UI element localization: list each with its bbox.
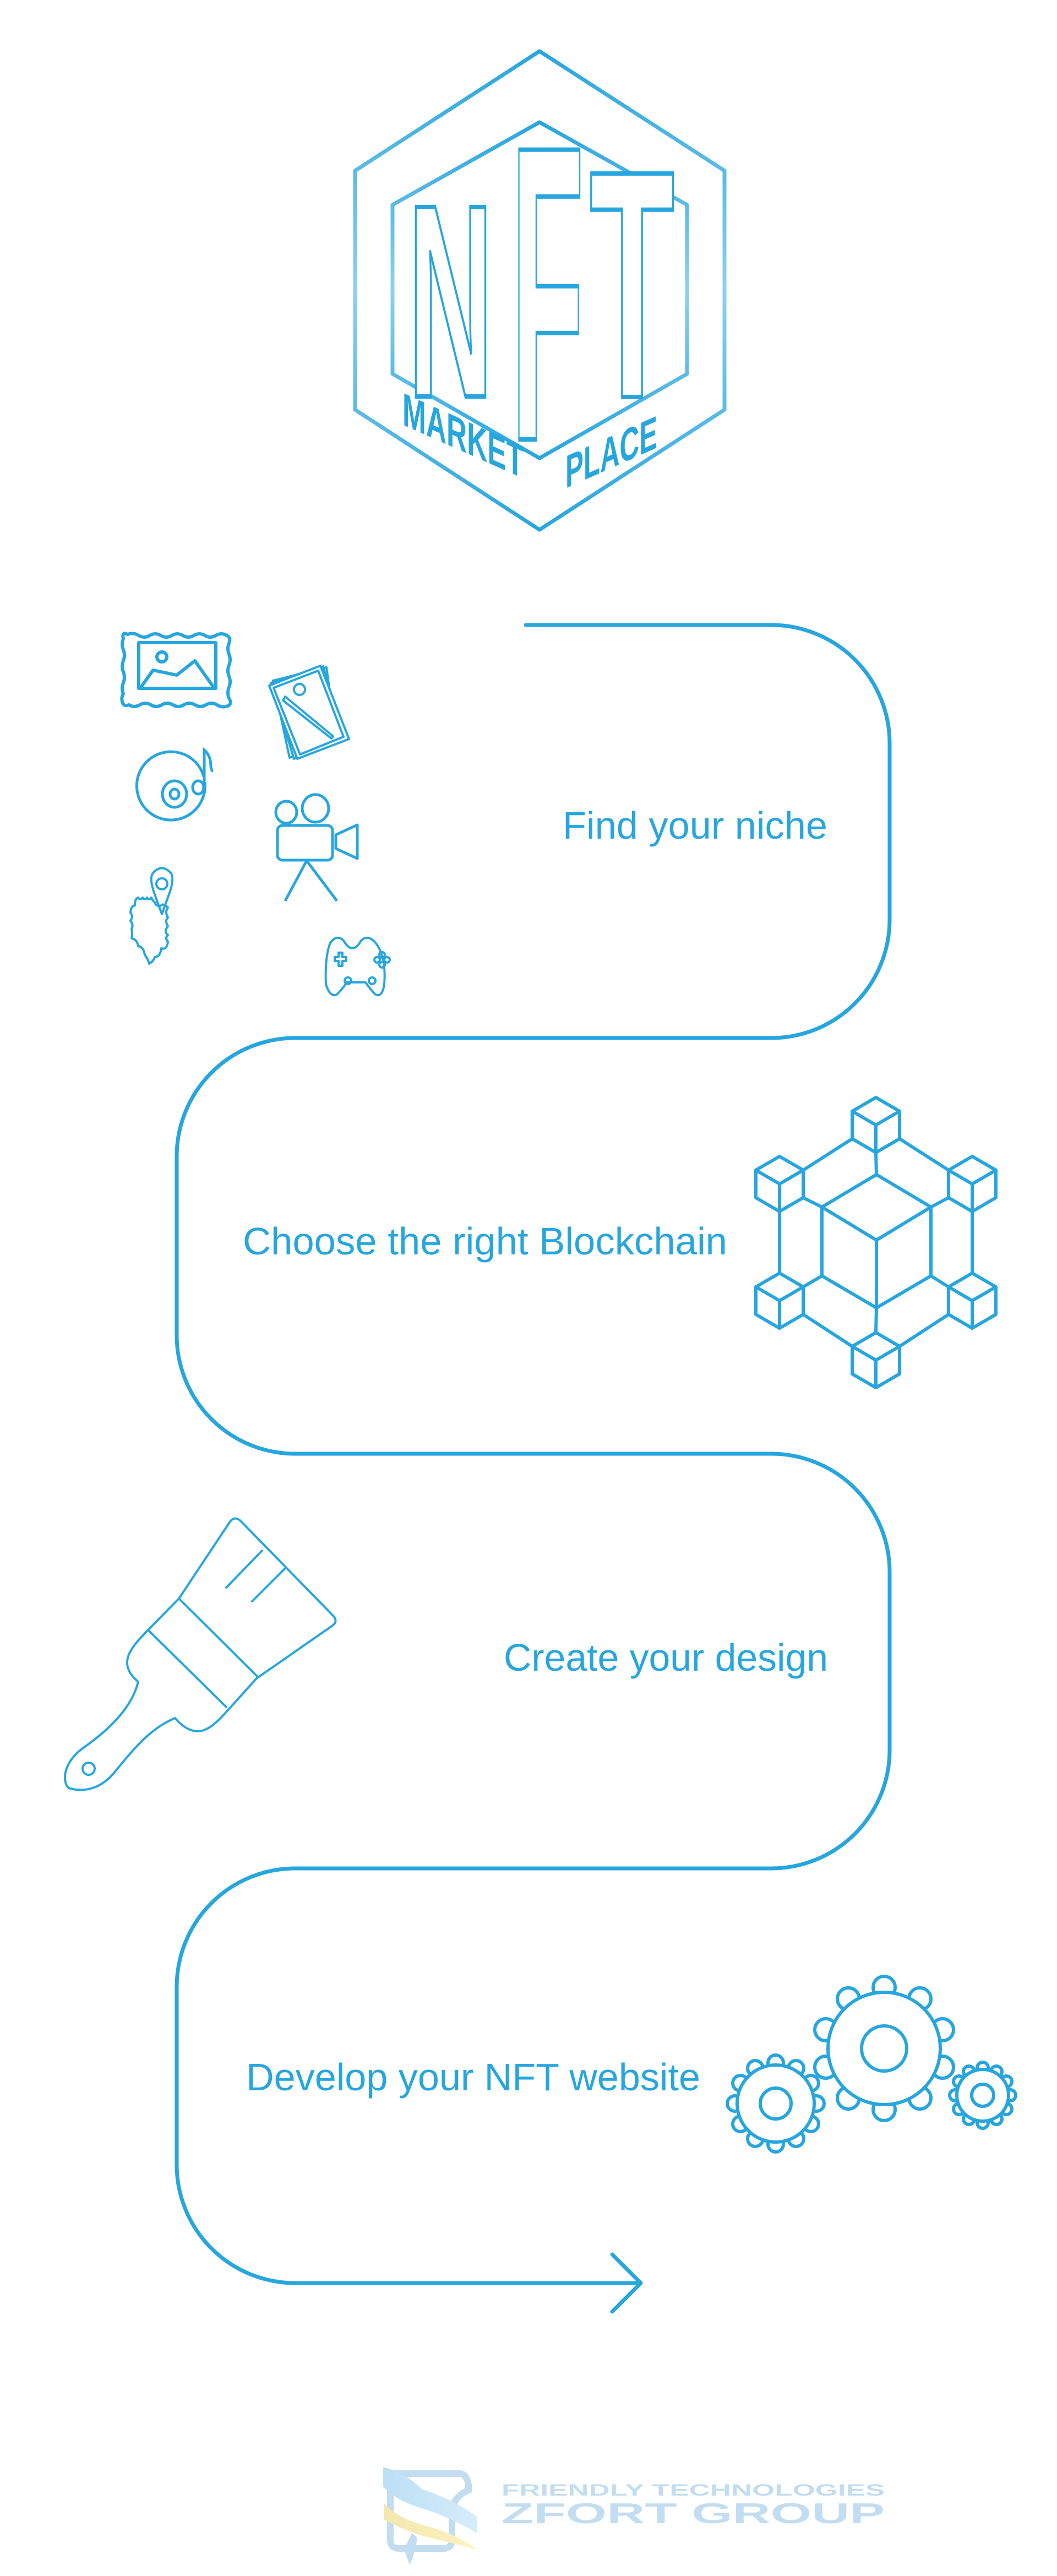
icon: blockchain cubes	[756, 1097, 996, 1388]
step 1 text: Find your niche	[563, 804, 827, 847]
footer logo: Zfort Group: FRIENDLY TECHNOLOGIES	[502, 2481, 885, 2499]
icon: music disc	[137, 750, 213, 820]
logo: NFT marketplace hexagon: F	[511, 58, 584, 529]
logo: NFT marketplace hexagon: MARKET	[402, 383, 524, 488]
logo: NFT marketplace hexagon: PLACE	[565, 405, 657, 498]
icon: card stack	[269, 666, 349, 759]
footer logo: Zfort Group: ZFORT GROUP	[502, 2498, 885, 2530]
icon: paint brush	[65, 1518, 336, 1790]
icon: gears	[727, 1976, 1016, 2152]
serpentine path with arrow	[177, 625, 890, 2312]
gear big	[815, 1976, 954, 2121]
footer logo: Zfort Group	[383, 2467, 885, 2565]
logo: NFT marketplace hexagon	[355, 51, 724, 530]
icon: video camera on tripod	[276, 795, 357, 901]
logo: NFT marketplace hexagon: N	[408, 147, 493, 455]
icon: framed picture	[122, 633, 231, 707]
step 3 text: Create your design	[504, 1636, 828, 1679]
logo mark	[383, 2467, 477, 2565]
gear left	[727, 2055, 824, 2152]
icon: map pin on region	[130, 868, 172, 964]
icon: gamepad	[326, 938, 390, 995]
step 2 text: Choose the right Blockchain	[243, 1220, 727, 1263]
logo: NFT marketplace hexagon: T	[590, 104, 674, 466]
step 4 text: Develop your NFT website	[246, 2056, 700, 2099]
gear right	[950, 2062, 1016, 2128]
